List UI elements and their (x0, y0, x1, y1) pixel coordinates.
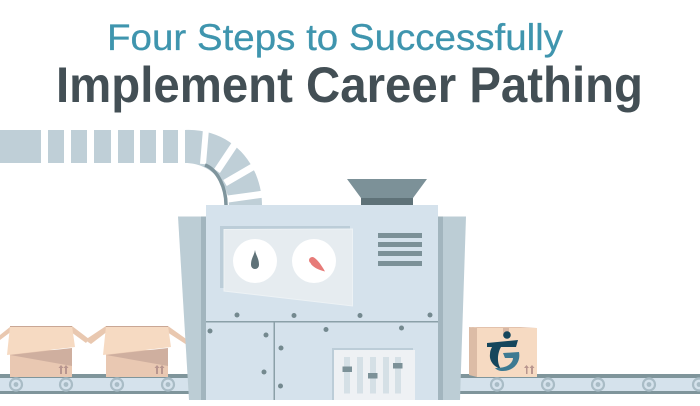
hopper (347, 179, 427, 205)
arrows (524, 365, 534, 374)
title (56, 17, 643, 113)
duct pipe (0, 129, 264, 205)
machine body (206, 205, 438, 400)
logo (487, 331, 519, 371)
gauge right (292, 239, 336, 283)
gauge left (233, 239, 277, 283)
panel seams (206, 321, 438, 400)
conveyor right (450, 374, 700, 394)
open box 2 (85, 326, 189, 377)
sliders (342, 357, 402, 394)
title: Implement Career Pathing (56, 57, 643, 113)
control panel (332, 348, 415, 400)
machine side wing right (438, 216, 466, 400)
conveyor left (0, 374, 190, 394)
vent slats (378, 233, 422, 266)
title: Four Steps to Successfully (107, 17, 564, 58)
open box 1 (0, 326, 89, 377)
closed box with logo (469, 327, 537, 377)
machine side wing left (178, 216, 206, 400)
gauge window (220, 226, 352, 306)
rivets (208, 312, 432, 388)
